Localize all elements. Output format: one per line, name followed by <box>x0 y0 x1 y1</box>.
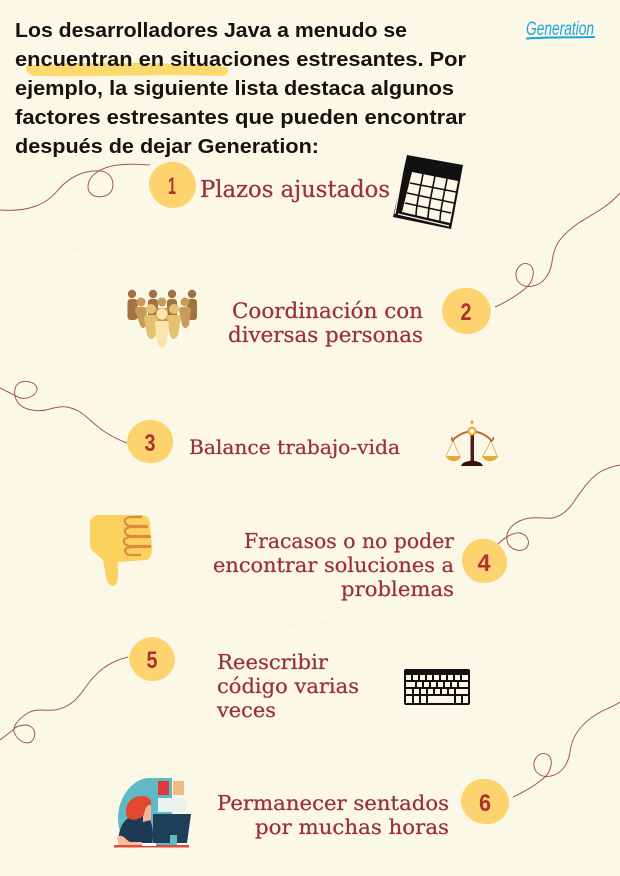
badge 5 <box>129 637 175 681</box>
badge 3 <box>127 420 173 463</box>
label 1: Plazos ajustados <box>200 177 390 203</box>
heading text: factores estresantes que pueden encontrar <box>15 107 466 129</box>
heading text: encuentran en situaciones estresantes. Por <box>15 49 466 71</box>
icon: woman at computer <box>114 778 191 848</box>
label 2: diversas personas <box>228 323 423 347</box>
label 4: Fracasos o no poder <box>244 529 454 553</box>
item 4: failures <box>90 465 620 601</box>
label 2: Coordinación con <box>232 299 423 323</box>
badge 4 <box>462 539 507 583</box>
badge 3: 3 <box>144 430 156 457</box>
label 4: problemas <box>341 577 454 601</box>
icon: scales <box>446 420 498 466</box>
highlight stroke <box>26 63 228 76</box>
badge 4: 4 <box>478 550 491 577</box>
label 4: encontrar soluciones a <box>213 553 454 577</box>
curve 1 <box>0 164 150 210</box>
item 6: sitting for long hours <box>114 702 620 848</box>
badge 6: 6 <box>479 790 491 817</box>
logo: Generation: Generation <box>526 19 594 40</box>
badge 5: 5 <box>146 647 158 674</box>
badge 1: 1 <box>168 173 176 200</box>
label 2 <box>228 299 423 347</box>
label 5: Reescribir <box>217 650 328 674</box>
heading text: Los desarrolladores Java a menudo se <box>15 20 407 42</box>
curve 6 <box>513 702 620 797</box>
badge 2 <box>442 288 491 334</box>
badge 2: 2 <box>460 299 472 326</box>
label 5: veces <box>216 698 276 722</box>
icon: group of people <box>128 290 197 348</box>
icon: calendar <box>393 155 463 229</box>
curve 3 <box>0 381 127 443</box>
item 5: rewriting code <box>0 637 470 743</box>
heading text <box>15 20 466 158</box>
label 5 <box>216 650 359 722</box>
heading text: ejemplo, la siguiente lista destaca algunos <box>15 78 454 100</box>
item 2: coordination <box>128 193 620 348</box>
label 6: Permanecer sentados <box>217 791 449 815</box>
label 5: código varias <box>217 674 359 698</box>
label 4 <box>213 529 454 601</box>
badge 6 <box>461 779 509 824</box>
curve 5 <box>0 657 128 743</box>
icon: thumbs down <box>90 515 152 586</box>
curve 4 <box>498 465 620 550</box>
label 6: por muchas horas <box>255 815 449 839</box>
label 6 <box>217 791 449 839</box>
item 1: tight deadlines <box>0 155 463 229</box>
item 3: work-life balance <box>0 381 498 466</box>
icon: keyboard <box>404 669 470 705</box>
curve 2 <box>495 193 620 307</box>
heading text: después de dejar Generation: <box>15 136 319 158</box>
label 3: Balance trabajo-vida <box>189 435 400 459</box>
badge 1 <box>149 162 196 208</box>
